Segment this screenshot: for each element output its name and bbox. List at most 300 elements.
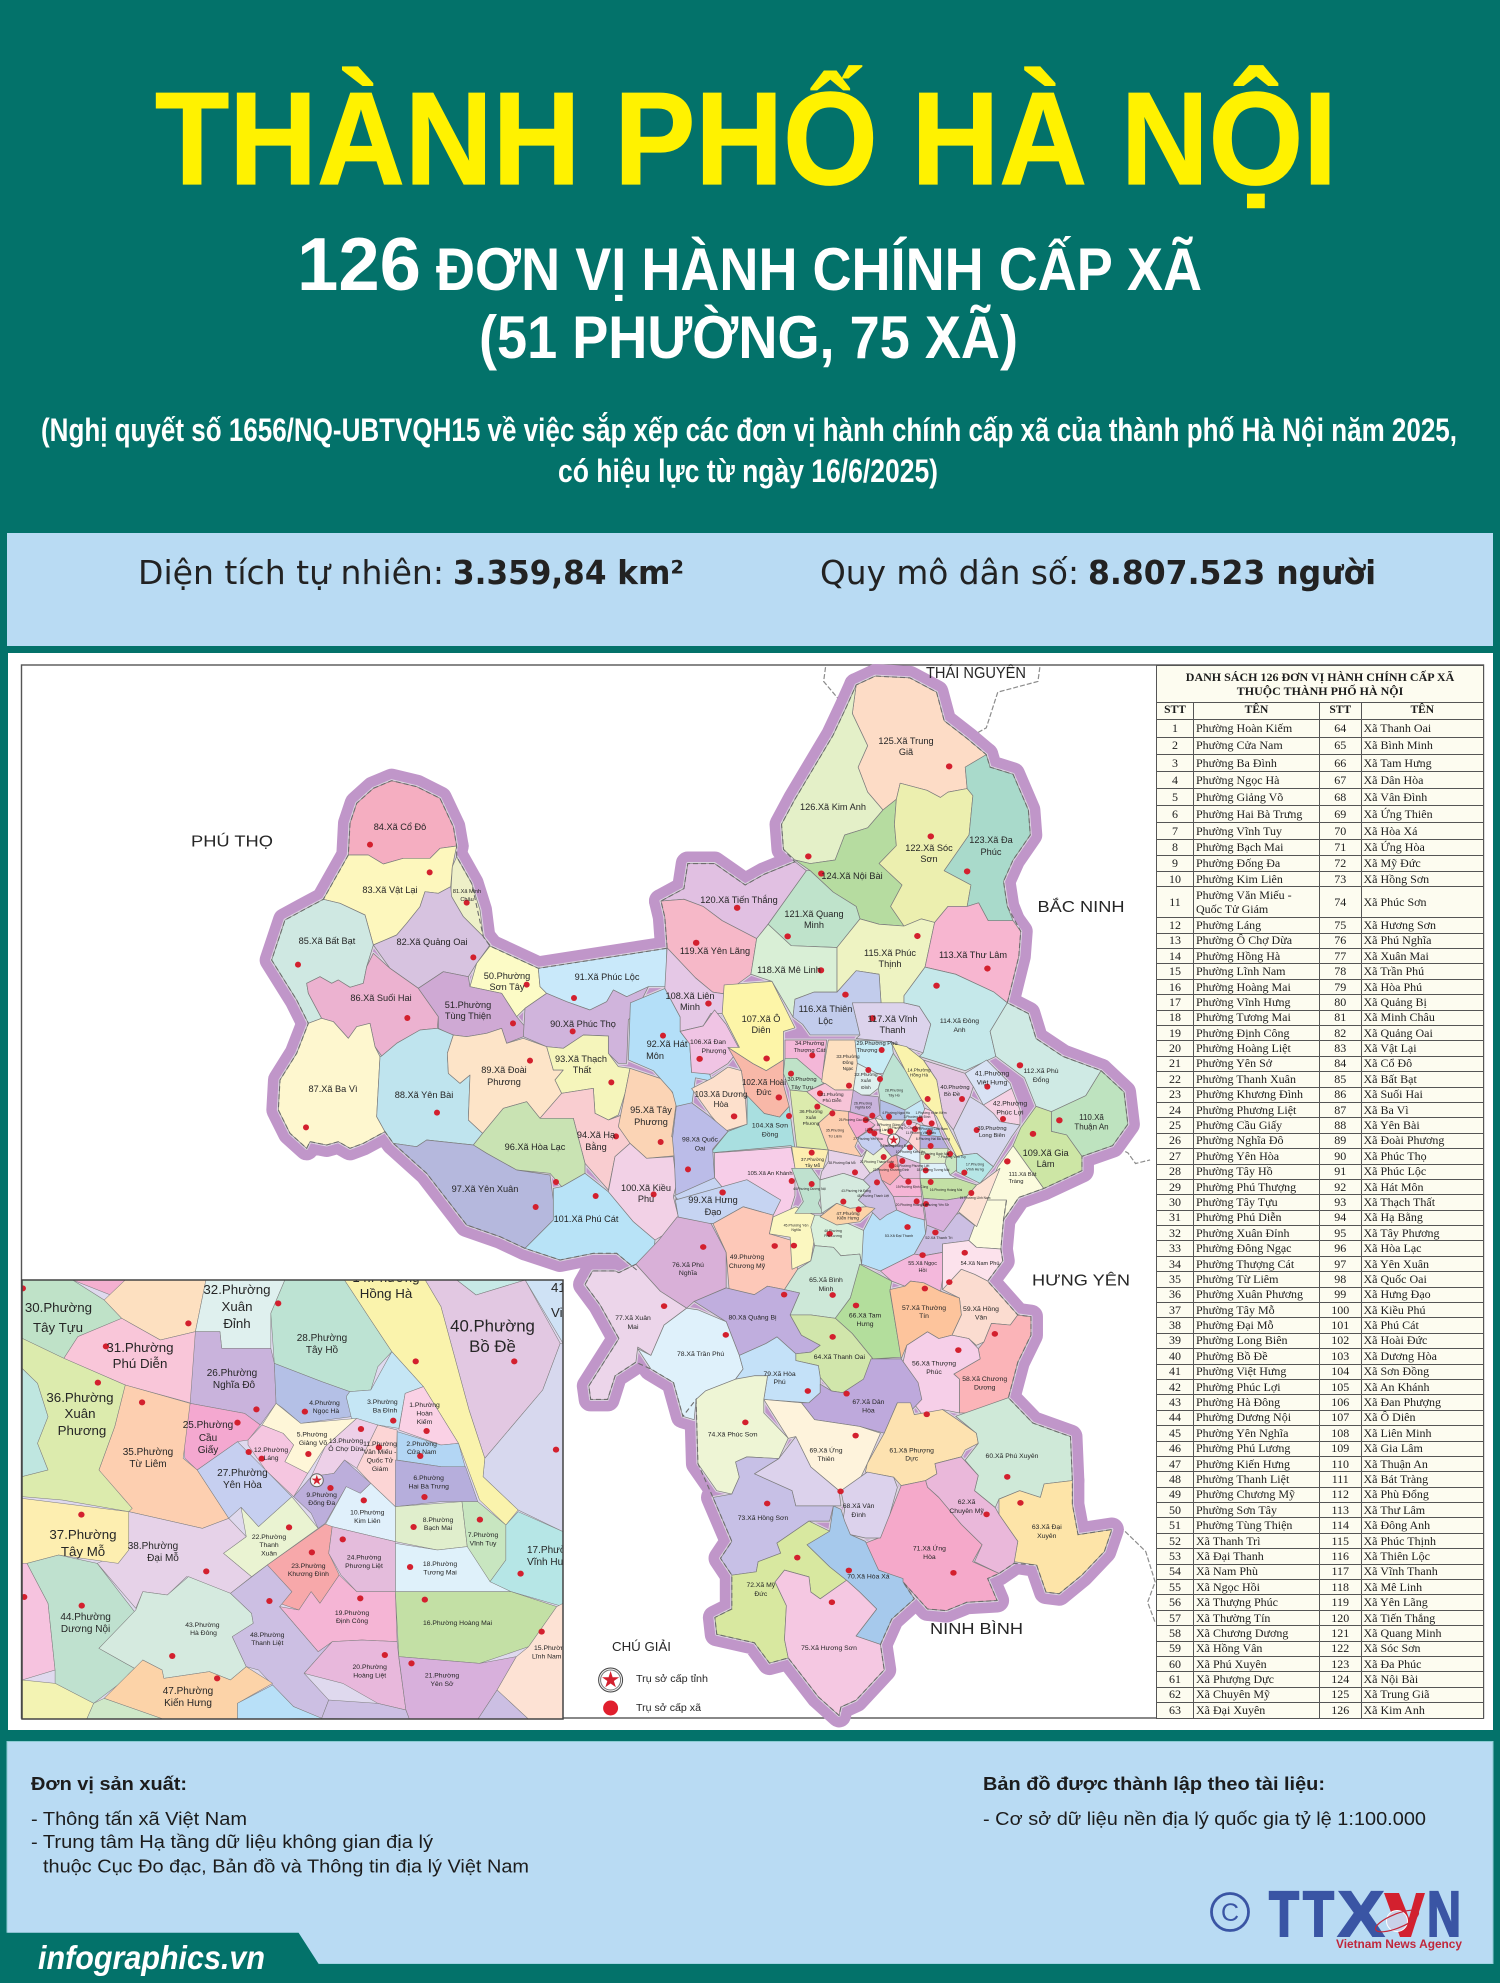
inset: labels: Giấy (198, 1444, 218, 1456)
table: list of 126 communes: Xã Hoài Đức (1364, 1333, 1427, 1347)
table: list of 126 communes: TÊN (1245, 704, 1268, 716)
map labels: west and north communes: Tùng Thiện (445, 1011, 491, 1021)
map labels: central communes: 43.Phường Hà Đông (841, 1189, 871, 1193)
map labels: south communes: 60.Xã Phú Xuyên (986, 1453, 1039, 1460)
table: list of 126 communes: 99 (1334, 1287, 1346, 1301)
table: list of 126 communes: 44 (1169, 1410, 1181, 1424)
table: list of 126 communes: 98 (1334, 1272, 1346, 1286)
table: list of 126 communes: 40 (1169, 1349, 1181, 1363)
logo: copyright mark (1212, 1894, 1248, 1930)
map labels: central communes: Xuân (806, 1115, 817, 1120)
table: list of 126 communes: Xã Thanh Oai (1364, 721, 1431, 735)
inset: labels: 38.Phường (128, 1541, 178, 1552)
inset: labels: 40.Phường (450, 1317, 535, 1336)
neighbouring province names (191, 665, 1130, 1638)
map labels: central communes: 2.Phường Cửa Nam (918, 1127, 948, 1131)
map labels: south communes: 80.Xã Quảng Bị (728, 1314, 777, 1322)
footer panel: - Trung tâm Hạ tầng dữ liệu không gian địa lý (31, 1832, 433, 1852)
inset: labels: Phú Diễn (113, 1356, 167, 1371)
map labels: central communes: 32.Phường (854, 1072, 878, 1077)
map labels: west and north communes: Sơn (920, 854, 938, 864)
inset: labels: Yên Sở (431, 1680, 454, 1688)
table: list of 126 communes: Xã Quang Minh (1364, 1626, 1442, 1640)
table: list of 126 communes: 108 (1331, 1426, 1349, 1440)
map labels: west and north communes: Lâm (1037, 1159, 1055, 1169)
map labels: central communes: Nghĩa Đô (855, 1106, 871, 1110)
map labels: south communes: Nghĩa (679, 1270, 697, 1277)
table: list of 126 communes: Phường Tây Hồ (1196, 1164, 1273, 1178)
map labels: south communes: 70.Xã Hòa Xá (847, 1574, 890, 1581)
table: list of 126 communes: 39 (1169, 1333, 1181, 1347)
table: list of 126 communes: Phường Vĩnh Tuy (1196, 824, 1282, 838)
table: list of 126 communes: 103 (1331, 1349, 1349, 1363)
map labels: central communes: 14.Phường (907, 1068, 931, 1072)
table: list of 126 communes: Xã Thạch Thất (1364, 1195, 1435, 1209)
map labels: west and north communes: 92.Xã Hát (647, 1039, 688, 1049)
table: list of 126 communes: 126 (1331, 1703, 1349, 1717)
inset: labels: 21.Phường (425, 1672, 459, 1680)
table: list of 126 communes: Phường Phú Diễn (1196, 1210, 1282, 1224)
table: list of 126 communes: 9 (1172, 856, 1178, 870)
table: list of 126 communes: 83 (1334, 1041, 1346, 1055)
table: list of 126 communes: Xã Kim Anh (1364, 1703, 1425, 1717)
table: list of 126 communes: Phường Văn Miếu - (1196, 888, 1292, 902)
table: list of 126 communes: STT (1329, 704, 1351, 716)
map labels: south communes: Phúc (926, 1369, 942, 1376)
table: list of 126 communes: TÊN (1410, 704, 1434, 716)
footer tab: infographics.vn (0, 1933, 1500, 1983)
map labels: central communes: 103.Xã Dương (695, 1090, 747, 1099)
table: list of 126 communes: Phường Hoàn Kiếm (1196, 721, 1292, 735)
table: list of 126 communes: Phường Cầu Giấy (1196, 1118, 1282, 1132)
table: list of 126 communes: 26 (1169, 1133, 1181, 1147)
table: list of 126 communes: 73 (1334, 872, 1346, 886)
inset: labels: Hồng Hà (360, 1286, 413, 1301)
map labels: central communes: 18.Phường Tương Mai (917, 1168, 950, 1172)
table: list of 126 communes: 123 (1331, 1657, 1349, 1671)
map labels: south communes: 65.Xã Bình (809, 1277, 843, 1284)
inset: labels: Khương Đình (288, 1571, 329, 1578)
table: list of 126 communes: 81 (1334, 1010, 1346, 1024)
map labels: central communes: 35.Phường (826, 1128, 844, 1132)
map labels: central communes: Tây Hồ (888, 1094, 900, 1098)
icon: provincial headquarters star on map (888, 1134, 900, 1146)
map labels: central communes: 105.Xã An Khánh (747, 1171, 793, 1177)
map labels: south communes: 45.Phường Yên (784, 1224, 808, 1228)
map labels: west and north communes: 86.Xã Suối Hai (350, 993, 412, 1003)
subtitle: ĐƠN VỊ HÀNH CHÍNH CẤP XÃ (436, 236, 1202, 303)
table: list of 126 communes: Xã Ô Diên (1364, 1410, 1415, 1424)
table: list of 126 communes: 23 (1169, 1087, 1181, 1101)
table: list of 126 communes: 62 (1169, 1687, 1181, 1701)
table: list of 126 communes: Phường Tương Mai (1196, 1010, 1291, 1024)
inset: labels: 9.Phường (306, 1492, 337, 1499)
map labels: west and north communes: Lộc (818, 1016, 833, 1026)
map labels: west and north communes: Sơn Tây (490, 982, 525, 992)
map labels: central communes: 29.Phường Phú (856, 1041, 898, 1047)
table: list of 126 communes: Phường Phương Liệt (1196, 1103, 1296, 1117)
table: list of 126 communes: 24 (1169, 1103, 1181, 1117)
table: list of 126 communes: Phường Thanh Liệt (1196, 1472, 1289, 1486)
map labels: south communes: Hòa (923, 1554, 936, 1561)
footer panel: - Cơ sở dữ liệu nền địa lý quốc gia tỷ lệ 1:100.000 (983, 1809, 1426, 1829)
inset: labels: Xuân (64, 1406, 96, 1421)
map labels: central communes: 38.Phường Đại Mỗ (828, 1160, 856, 1165)
map: commune office dots (295, 763, 1063, 1605)
table: list of 126 communes: 66 (1334, 756, 1346, 770)
table: list of 126 communes: 48 (1169, 1472, 1181, 1486)
map labels: central communes: 3.Phường Ba Đình (904, 1115, 931, 1119)
table: list of 126 communes: DANH SÁCH 126 ĐƠN VỊ HÀNH CHÍNH CẤP XÃ (1186, 670, 1454, 684)
map labels: south communes: Dực (905, 1456, 919, 1462)
table: list of 126 communes: Xã Tiến Thắng (1364, 1611, 1435, 1625)
table: list of 126 communes: 35 (1169, 1272, 1181, 1286)
inset: labels: 22.Phường (252, 1534, 286, 1541)
inset: labels: Kiến Hưng (164, 1697, 212, 1709)
map labels: central communes: 37.Phường (801, 1157, 825, 1162)
logo: TTXVN: X (1338, 1878, 1384, 1950)
table: list of 126 communes: 55 (1169, 1580, 1181, 1594)
map labels: south communes: 64.Xã Thanh Oai (814, 1354, 866, 1361)
map labels: south communes: 52.Xã Thanh Trì (925, 1236, 953, 1240)
map labels: central communes: 48.Phường Thanh Liệt (857, 1194, 889, 1198)
table: list of 126 communes: 65 (1334, 738, 1346, 752)
map labels: south communes: Thiên (817, 1456, 835, 1463)
map labels: west and north communes: 88.Xã Yên Bài (395, 1090, 453, 1100)
map labels: west and north communes: 81.Xã Minh (453, 889, 481, 895)
table: list of 126 communes: 1 (1172, 721, 1178, 735)
table: list of 126 communes: Xã Đông Anh (1364, 1518, 1430, 1532)
table: list of 126 communes: 100 (1331, 1303, 1349, 1317)
table: list of 126 communes: 115 (1331, 1534, 1349, 1548)
inset: labels: 10.Phường (350, 1510, 385, 1516)
map labels: south communes: Chuyên Mỹ (949, 1508, 984, 1515)
table: list of 126 communes: Xã Ứng Thiên (1364, 807, 1433, 821)
table: list of 126 communes: 121 (1331, 1626, 1349, 1640)
table: list of 126 communes: 31 (1169, 1210, 1181, 1224)
table: list of 126 communes: 64 (1334, 721, 1346, 735)
table: list of 126 communes: 61 (1169, 1672, 1181, 1686)
inset: labels: Giám (372, 1466, 388, 1473)
table: list of 126 communes: 89 (1334, 1133, 1346, 1147)
map labels: south communes: 63.Xã Đại (1032, 1524, 1062, 1531)
map labels: central communes: 44.Phường Dương Nội (793, 1187, 826, 1191)
map: dashed provincial boundary (272, 676, 1128, 1715)
table: list of 126 communes: Xã Hòa Phú (1364, 980, 1422, 994)
table: list of 126 communes: Phường Kim Liên (1196, 872, 1283, 886)
map labels: south communes: 79.Xã Hòa (764, 1371, 796, 1378)
table: list of 126 communes: 50 (1169, 1503, 1181, 1517)
table: list of 126 communes: 106 (1331, 1395, 1349, 1409)
table: list of 126 communes: 120 (1331, 1611, 1349, 1625)
table: list of 126 communes: 28 (1169, 1164, 1181, 1178)
table: list of 126 communes: Phường Hồng Hà (1196, 949, 1280, 963)
inset: labels: 25.Phường (183, 1420, 233, 1431)
map labels: west and north communes: Phú (638, 1194, 654, 1204)
table: list of 126 communes: Phường Yên Hòa (1196, 1149, 1279, 1163)
footer panel (7, 1742, 1493, 1964)
map labels: south communes: Nghĩa (791, 1228, 801, 1232)
map labels: south communes: 68.Xã Vân (843, 1503, 875, 1510)
table: list of 126 communes: 107 (1331, 1410, 1349, 1424)
inset: labels: 15.Phường (534, 1645, 569, 1652)
map labels: west and north communes: Bằng (585, 1142, 607, 1152)
table: list of 126 communes: 12 (1169, 918, 1181, 932)
map labels: west and north communes: Giã (899, 747, 914, 757)
map labels: west and north communes: 124.Xã Nội Bài (821, 871, 883, 881)
table: list of 126 communes: Phường Tùng Thiện (1196, 1518, 1292, 1532)
table: list of 126 communes: Xã Kiều Phú (1364, 1303, 1426, 1317)
footer panel: Bản đồ được thành lập theo tài liệu: (983, 1774, 1325, 1794)
inset: labels: 14.Phường (352, 1270, 420, 1285)
table: list of 126 communes: 54 (1169, 1564, 1181, 1578)
table: list of 126 communes: 56 (1169, 1595, 1181, 1609)
table: list of 126 communes: 119 (1331, 1595, 1349, 1609)
table: list of 126 communes: Phường Ngọc Hà (1196, 773, 1280, 787)
table: list of 126 communes: Phường Xuân Đỉnh (1196, 1226, 1290, 1240)
map labels: west and north communes: 85.Xã Bất Bạt (299, 936, 356, 946)
table: list of 126 communes: 109 (1331, 1441, 1349, 1455)
inset: labels: Hai Bà Trưng (408, 1484, 449, 1490)
map labels: central communes: Phương (803, 1121, 820, 1126)
map labels: central communes: Đồng (762, 1130, 778, 1138)
subtitle: (51 PHƯỜNG, 75 XÃ) (479, 304, 1018, 371)
table: list of 126 communes: Xã Đa Phúc (1364, 1657, 1421, 1671)
map labels: central communes: 36.Phường (799, 1109, 823, 1114)
table: list of 126 communes: Xã Đại Thanh (1196, 1549, 1264, 1563)
table: list of 126 communes: Xã Trần Phú (1364, 964, 1424, 978)
map labels: south communes: Phú (774, 1379, 786, 1386)
map labels: west and north communes: 101.Xã Phú Cát (554, 1214, 619, 1224)
table: list of 126 communes: Phường Thượng Cát (1196, 1257, 1294, 1271)
inset: labels: 19.Phường (335, 1610, 369, 1617)
inset: labels: Yên Hòa (223, 1480, 262, 1491)
map labels: central communes: Bồ Đề (944, 1092, 960, 1098)
table: list of 126 communes: 29 (1169, 1180, 1181, 1194)
table: list of 126 communes: Xã Yên Xuân (1364, 1257, 1429, 1271)
table: list of 126 communes: 92 (1334, 1180, 1346, 1194)
map labels: south communes: Hòa (862, 1408, 875, 1414)
inset: labels: Cửa Nam (407, 1448, 437, 1456)
table: list of 126 communes: 118 (1331, 1580, 1349, 1594)
map labels: central communes: 19.Phường Định Công (896, 1185, 928, 1189)
table: list of 126 communes: 71 (1334, 840, 1346, 854)
map labels: south communes: Hồi (918, 1268, 927, 1274)
table: list of 126 communes: Xã Nam Phù (1196, 1564, 1258, 1578)
map labels: central communes: 10.Phường Kim Liên (896, 1150, 925, 1154)
table: list of 126 communes: 77 (1334, 949, 1346, 963)
table: list of 126 communes: Xã An Khánh (1364, 1380, 1430, 1394)
table: list of 126 communes: 5 (1172, 790, 1178, 804)
map labels: south communes: 58.Xã Chương (962, 1376, 1007, 1383)
inset: labels: Tây Mỗ (61, 1544, 105, 1559)
inset: labels: Hoàng Liệt (353, 1672, 386, 1680)
table: list of 126 communes: Phường Dương Nội (1196, 1410, 1291, 1424)
map labels: west and north communes: 120.Xã Tiến Thắng (700, 895, 778, 905)
map labels: west and north communes: 82.Xã Quảng Oai (396, 937, 468, 947)
inset: labels: 31.Phường (106, 1340, 174, 1355)
table: list of 126 communes: Xã Hồng Vân (1196, 1641, 1262, 1655)
table: list of 126 communes: 114 (1331, 1518, 1349, 1532)
table: list of 126 communes: 27 (1169, 1149, 1181, 1163)
inset: labels: Ba Đình (373, 1408, 397, 1414)
table: list of 126 communes: 85 (1334, 1072, 1346, 1086)
map labels: central communes: 24.Phường Phương Liệt (895, 1164, 929, 1168)
map labels: central communes: Đông (843, 1060, 854, 1065)
inset: labels: Phương Liệt (345, 1563, 383, 1570)
table: list of 126 communes: Xã Trung Giã (1364, 1687, 1430, 1701)
table: list of 126 communes: STT (1164, 704, 1186, 716)
map labels: south communes: 62.Xã (958, 1499, 976, 1506)
inset: labels: 48.Phường (250, 1632, 285, 1639)
map labels: west and north communes: 113.Xã Thư Lâm (939, 950, 1007, 960)
map labels: central communes: 5.Phường Giảng Võ (877, 1123, 905, 1127)
map labels: west and north communes: 118.Xã Mê Linh (757, 965, 821, 975)
table: list of 126 communes: 18 (1169, 1010, 1181, 1024)
table: list of 126 communes: Xã Suối Hai (1364, 1087, 1423, 1101)
table: list of 126 communes: 105 (1331, 1380, 1349, 1394)
map labels: south communes: Phú Lương (824, 1234, 842, 1238)
map labels: south communes: Mai (628, 1324, 639, 1331)
inset: labels: 26.Phường (207, 1368, 257, 1379)
map labels: south communes: Minh (819, 1286, 834, 1293)
inset: labels: Nghĩa Đô (213, 1380, 256, 1391)
inset: labels: 28.Phường (297, 1333, 347, 1344)
inset: labels: Tây Tựu (33, 1320, 83, 1335)
table: list of 126 communes: 45 (1169, 1426, 1181, 1440)
table: list of 126 communes: Xã Phúc Thọ (1364, 1149, 1427, 1163)
table: list of 126 communes: 38 (1169, 1318, 1181, 1332)
map labels: south communes: 73.Xã Hồng Sơn (738, 1513, 788, 1522)
table: list of 126 communes (1156, 666, 1484, 1719)
inset: labels (25, 1280, 562, 1708)
inset: labels: Vĩnh Tuy (470, 1540, 497, 1548)
resolution note (41, 412, 1457, 489)
map labels: central communes: Đức (756, 1088, 772, 1097)
map labels: south communes: Hưng (856, 1321, 874, 1328)
map: commune regions (272, 676, 1128, 1715)
inset: labels: 24.Phường (347, 1554, 381, 1562)
table: list of 126 communes: 58 (1169, 1626, 1181, 1640)
map labels: south communes: 61.Xã Phượng (889, 1448, 934, 1454)
stats band: Quy mô dân số: (820, 553, 1079, 592)
map labels: west and north communes: 107.Xã Ô (742, 1014, 780, 1024)
map labels: south communes: 72.Xã Mỹ (746, 1582, 776, 1589)
table: list of 126 communes: 15 (1169, 964, 1181, 978)
map labels: south communes: 49.Phường (730, 1254, 764, 1261)
table: list of 126 communes: Phường Tây Tựu (1196, 1195, 1278, 1209)
map labels: central communes: 27.Phường Yên Hòa (853, 1137, 883, 1141)
stats band: 3.359,84 km² (453, 553, 684, 592)
table: list of 126 communes: 93 (1334, 1195, 1346, 1209)
map: gap filler (272, 676, 1128, 1715)
map labels: south communes: 77.Xã Xuân (615, 1315, 651, 1322)
map labels: central communes: 16.Phường Hoàng Mai (930, 1188, 962, 1192)
table: list of 126 communes: 87 (1334, 1103, 1346, 1117)
table: list of 126 communes: 113 (1331, 1503, 1349, 1517)
table: list of 126 communes: 59 (1169, 1641, 1181, 1655)
map labels: south communes: Dương (974, 1384, 996, 1392)
table: list of 126 communes: 88 (1334, 1118, 1346, 1132)
table: list of 126 communes: 42 (1169, 1380, 1181, 1394)
inset: labels: Bạch Mai (424, 1525, 453, 1532)
map labels: central communes: 40.Phường (940, 1085, 970, 1091)
table: list of 126 communes: Quốc Tử Giám (1196, 902, 1268, 916)
legend: Trụ sở cấp tỉnh (636, 1673, 708, 1685)
inset: labels: Thanh (259, 1542, 279, 1549)
table: list of 126 communes: Xã Phú Xuyên (1196, 1657, 1267, 1671)
inset: labels: 47.Phường (163, 1686, 213, 1697)
table: list of 126 communes: 37 (1169, 1303, 1181, 1317)
map labels: south communes: 78.Xã Trần Phú (677, 1349, 724, 1358)
map labels: central communes: 47.Phường (836, 1211, 860, 1216)
map labels: central communes: 22.Phường Thanh Xuân (860, 1160, 894, 1164)
table: list of 126 communes: Xã Ngọc Hồi (1196, 1580, 1260, 1594)
map labels: central communes: 102.Xã Hoài (742, 1078, 786, 1087)
map labels: west and north communes: 115.Xã Phúc (864, 948, 916, 958)
table: list of 126 communes: 82 (1334, 1026, 1346, 1040)
inset: labels: 35.Phường (123, 1447, 173, 1458)
table: list of 126 communes: Xã Mỹ Đức (1364, 856, 1421, 870)
inset: labels: 36.Phường (46, 1390, 114, 1405)
inset: labels: Kiếm (417, 1417, 433, 1426)
map labels: central communes: 26.Phường (854, 1102, 872, 1106)
table: list of 126 communes: 6 (1172, 807, 1178, 821)
map labels: central communes: Từ Liêm (828, 1134, 842, 1138)
map labels: west and north communes: Minh (680, 1002, 700, 1012)
table: list of 126 communes: 96 (1334, 1241, 1346, 1255)
table: list of 126 communes: Xã Thiên Lộc (1364, 1549, 1430, 1563)
map labels: west and north communes: 121.Xã Quang (784, 909, 844, 919)
inset: labels: Cầu (199, 1432, 217, 1444)
table: list of 126 communes: 20 (1169, 1041, 1181, 1055)
table: list of 126 communes: 36 (1169, 1287, 1181, 1301)
table: list of 126 communes: 19 (1169, 1026, 1181, 1040)
table: list of 126 communes: Xã Vân Đình (1364, 790, 1427, 804)
inset: labels: Hà Đông (190, 1630, 217, 1637)
inset: labels: 43.Phường (185, 1622, 220, 1629)
map labels: central communes: 13.Phường Ô Chợ Dừa (887, 1125, 921, 1130)
map labels: west and north communes: 99.Xã Hưng (688, 1195, 738, 1205)
table: list of 126 communes: Xã Gia Lâm (1364, 1441, 1423, 1455)
inset: labels: 12.Phường (254, 1447, 288, 1454)
map labels: central communes: 34.Phường (795, 1041, 824, 1047)
inset: labels: 2.Phường (406, 1441, 437, 1448)
map labels: west and north communes: 95.Xã Tây (630, 1105, 672, 1115)
table: list of 126 communes: 63 (1169, 1703, 1181, 1717)
logo: copyright mark: C (1221, 1899, 1239, 1927)
table: list of 126 communes: Phường Láng (1196, 918, 1261, 932)
table: list of 126 communes: Phường Khương Đình (1196, 1087, 1303, 1101)
inset: labels: Đỉnh (223, 1316, 251, 1331)
table: list of 126 communes: Xã Hưng Đạo (1364, 1287, 1431, 1301)
table: list of 126 communes: Phường Đông Ngạc (1196, 1241, 1292, 1255)
map labels: central communes: Phúc Lợi (996, 1110, 1024, 1116)
table: list of 126 communes: 53 (1169, 1549, 1181, 1563)
inset: labels: 13.Phường (329, 1438, 363, 1445)
map labels: south communes: 56.Xã Thượng (912, 1360, 956, 1368)
map labels: central communes: 114.Xã Đông (940, 1018, 979, 1025)
map labels: south communes: 53.Xã Đại Thanh (885, 1234, 913, 1238)
table: list of 126 communes: Xã Hòa Xá (1364, 824, 1417, 838)
map labels: west and north communes: 87.Xã Ba Vì (308, 1084, 358, 1094)
subtitle: 126 (297, 222, 421, 306)
table: list of 126 communes: 4 (1172, 773, 1178, 787)
table: list of 126 communes: 46 (1169, 1441, 1181, 1455)
map labels: west and north communes: Diên (752, 1025, 770, 1035)
inset: star icon (310, 1474, 323, 1487)
table: list of 126 communes: 70 (1334, 824, 1346, 838)
